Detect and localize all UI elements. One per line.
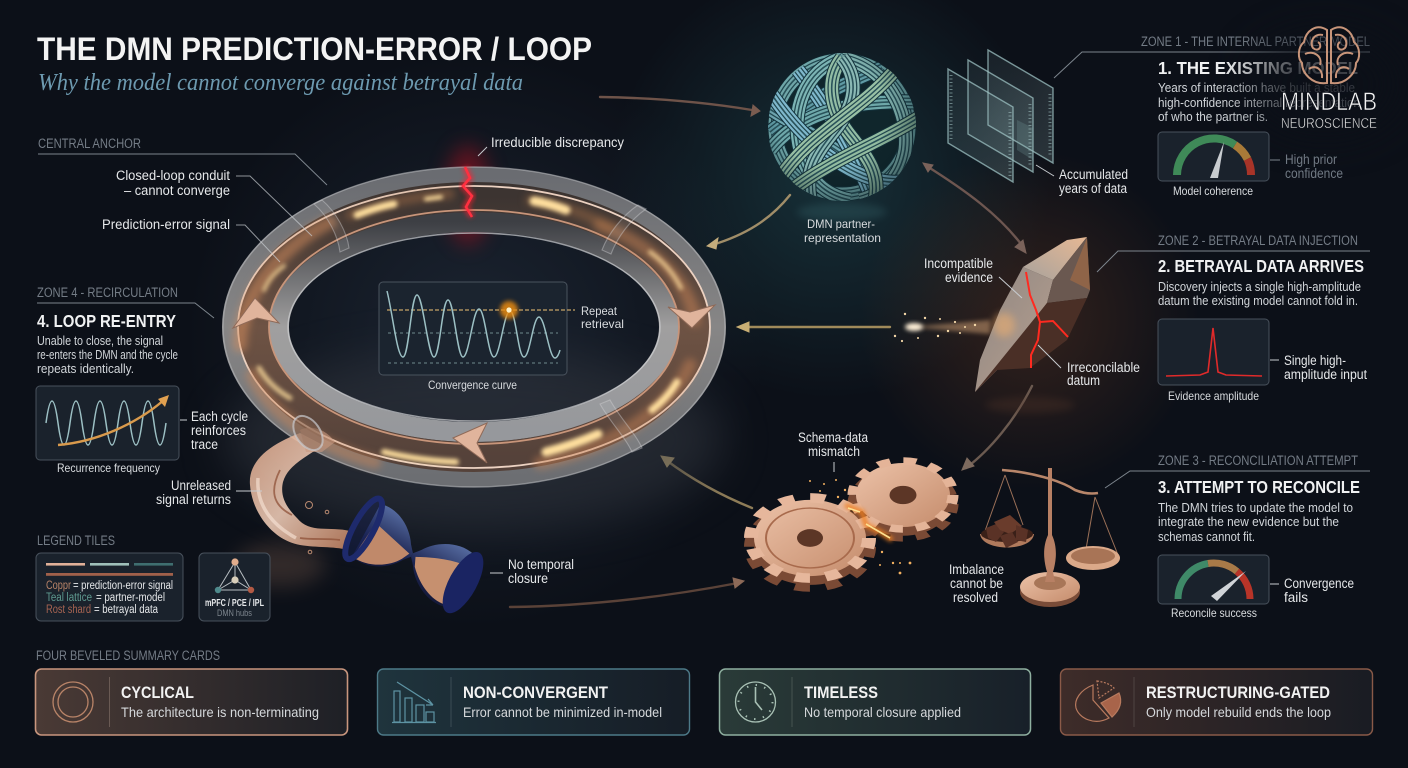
panel: zone 2 betrayal data: 2. BETRAYAL DATA ARRIVES (1158, 256, 1364, 276)
legend tile: materials: Coppr (46, 580, 71, 592)
label: repeat retrieval: retrieval (581, 317, 624, 331)
red glow at crack (446, 145, 490, 245)
label: imbalance cannot be resolved (949, 562, 1004, 605)
zone 3 body: schemas cannot fit. (1158, 529, 1255, 544)
panel: zone 2 betrayal data (1097, 233, 1370, 403)
icon: cycle rings (53, 682, 93, 722)
chart: recurrence frequency (36, 386, 179, 460)
label: accumulated years of data: years of data (1059, 181, 1127, 196)
label: irreconcilable datum: datum (1067, 373, 1100, 388)
label: DMN partner-representation: representation (804, 231, 881, 245)
card: restructuring-gated: RESTRUCTURING-GATED (1146, 683, 1330, 702)
collision sparks (809, 479, 911, 574)
zone 3 body (1158, 500, 1353, 544)
logo: MindLab Neuroscience: MINDLAB (1281, 88, 1377, 116)
red cracks (1026, 272, 1068, 368)
label: each cycle reinforces trace: reinforces (191, 423, 246, 438)
label: irreconcilable datum: Irreconcilable (1067, 360, 1140, 375)
direction arrow: left (233, 298, 279, 328)
label: convergence fails: fails (1284, 590, 1308, 605)
label: no temporal closure (490, 557, 574, 586)
panel: zone 2 betrayal data: Evidence amplitude (1168, 389, 1259, 403)
zone 4 body: re-enters the DMN and the cycle (37, 347, 178, 362)
zone 3 body: integrate the new evidence but the (1158, 514, 1339, 529)
zone 1 body: Years of interaction have built a stable (1158, 80, 1355, 95)
glass tube body (223, 167, 725, 487)
flow arrows (510, 97, 1032, 607)
label: each cycle reinforces trace: trace (191, 437, 218, 452)
panel: zone 4 recirculation: ZONE 4 - RECIRCULATION (37, 285, 178, 300)
card: non-convergent (378, 669, 690, 735)
annotations: left of ring (38, 136, 327, 262)
subtitle: Why the model cannot converge against betrayal data (38, 70, 523, 96)
panel: zone 4 recirculation: Recurrence frequency (57, 461, 160, 475)
legend tile: materials: = prediction-error signal (73, 580, 173, 592)
logo: MindLab Neuroscience (1281, 27, 1377, 132)
label: convergence fails (1270, 576, 1354, 605)
label: schema-data mismatch: Schema-data (798, 430, 868, 445)
zone 4 body: repeats identically. (37, 361, 134, 376)
zone 1 body: of who the partner is. (1158, 109, 1268, 124)
panel: zone 4 recirculation: 4. LOOP RE-ENTRY (37, 311, 176, 331)
label: DMN partner-representation (804, 217, 881, 245)
label: irreducible discrepancy (478, 135, 624, 156)
panel: zone 4 recirculation (36, 285, 248, 475)
label: prediction-error signal: Prediction-error signal (102, 217, 230, 232)
label: imbalance cannot be resolved: Imbalance (949, 562, 1004, 577)
zone 2 body: Discovery injects a single high-amplitude (1158, 279, 1361, 294)
icon: clock (736, 682, 776, 722)
central anchor heading: CENTRAL ANCHOR (38, 136, 141, 151)
label: closed-loop conduit (116, 168, 312, 236)
zone 4 body (37, 333, 178, 376)
label: each cycle reinforces trace: Each cycle (191, 409, 248, 424)
small gear (853, 461, 953, 538)
label: convergence curve: Convergence curve (428, 378, 517, 392)
label: schema-data mismatch (798, 430, 868, 472)
icon: rust shard (975, 237, 1090, 413)
label: accumulated years of data: Accumulated (1059, 167, 1128, 182)
legend tile: DMN hubs (199, 553, 270, 621)
panel: zone 2 betrayal data: ZONE 2 - BETRAYAL DATA INJECTION (1158, 233, 1358, 248)
label: closed-loop conduit: – cannot converge (124, 183, 230, 198)
zone 1 body (1158, 80, 1360, 124)
icon: accumulated glass panes (948, 50, 1053, 182)
label: incompatible evidence (924, 256, 1022, 298)
card: non-convergent: NON-CONVERGENT (463, 683, 609, 702)
label: single high-amplitude input (1270, 353, 1367, 382)
zone 1 body: high-confidence internal representation (1158, 95, 1360, 110)
card: cyclical (36, 669, 348, 735)
panel: zone 3 reconciliation: Reconcile success (1171, 606, 1257, 620)
zone 4 body: Unable to close, the signal (37, 333, 163, 348)
card: timeless (720, 669, 1030, 735)
label: incompatible evidence: evidence (945, 270, 993, 285)
icon: declining bars (392, 682, 436, 722)
zone 2 body (1158, 279, 1361, 308)
comet: betrayal data injection (894, 313, 990, 342)
card: restructuring-gated: Only model rebuild ends the loop (1146, 704, 1331, 720)
icon: teal lattice sphere (768, 53, 918, 221)
label: closed-loop conduit: Closed-loop conduit (116, 168, 230, 183)
label: single high-amplitude input: Single high- (1284, 353, 1346, 368)
icon: hourglass (339, 494, 492, 619)
card: timeless: No temporal closure applied (804, 704, 961, 720)
label: schema-data mismatch: mismatch (808, 444, 860, 459)
label: incompatible evidence: Incompatible (924, 256, 993, 271)
panel: zone 3 reconciliation (1105, 453, 1370, 620)
card: cyclical: CYCLICAL (121, 683, 194, 702)
card: restructuring-gated (1060, 669, 1372, 735)
legend tile: materials: = betrayal data (94, 604, 159, 616)
icon: pie chart (1076, 681, 1121, 721)
label: accumulated years of data (1036, 165, 1128, 196)
direction arrow: bottom (453, 423, 487, 463)
gauge: model coherence (1158, 132, 1269, 181)
label: irreducible discrepancy: Irreducible discrepancy (491, 135, 624, 150)
direction arrow: right (668, 305, 715, 328)
legend section (36, 533, 270, 621)
label: unreleased signal returns: signal returns (156, 492, 231, 507)
central ring conduit (223, 145, 725, 530)
logo: MindLab Neuroscience: NEUROSCIENCE (1281, 115, 1377, 132)
legend tile: materials: Rost shard (46, 604, 91, 616)
label: prediction-error signal (102, 217, 280, 262)
label: high prior confidence (1270, 152, 1343, 181)
central anchor heading (38, 136, 327, 185)
panel: zone 3 reconciliation: ZONE 3 - RECONCILIATION ATTEMPT (1158, 453, 1358, 468)
legend section: LEGEND TILES (37, 533, 115, 548)
label: single high-amplitude input: amplitude input (1284, 367, 1367, 382)
large gear (751, 498, 869, 587)
chart: evidence amplitude (1158, 319, 1269, 385)
label: DMN partner-representation: DMN partner- (807, 217, 875, 231)
warm glow segments (240, 194, 695, 463)
label: irreconcilable datum (1038, 345, 1140, 388)
legend tile: DMN hubs: mPFC / PCE / IPL (205, 598, 264, 609)
ring reflection shadow (224, 350, 724, 530)
label: high prior confidence: High prior (1285, 152, 1337, 167)
card: non-convergent: Error cannot be minimized in-model (463, 704, 662, 720)
gauge: reconcile success (1158, 555, 1269, 604)
panel: zone 1 existing model: 1. THE EXISTING MODEL (1158, 58, 1358, 78)
fracture: irreducible discrepancy (463, 167, 472, 217)
tube couplers (314, 200, 646, 452)
label: repeat retrieval (581, 304, 624, 331)
spout and leaking signal (235, 411, 350, 587)
legend tile: materials: Teal lattice (46, 592, 92, 604)
zone 2 body: datum the existing model cannot fold in. (1158, 293, 1358, 308)
label: each cycle reinforces trace (180, 409, 248, 452)
label: imbalance cannot be resolved: cannot be (950, 576, 1003, 591)
icon: mismatched gears (751, 461, 953, 587)
label: repeat retrieval: Repeat (581, 304, 618, 318)
label: unreleased signal returns (156, 478, 262, 507)
card: cyclical: The architecture is non-terminating (121, 704, 319, 720)
label: imbalance cannot be resolved: resolved (953, 590, 998, 605)
icon: balance scale (980, 468, 1120, 607)
label: convergence fails: Convergence (1284, 576, 1354, 591)
panel: convergence curve (379, 282, 575, 375)
panel: zone 3 reconciliation: 3. ATTEMPT TO RECONCILE (1158, 477, 1360, 497)
card: timeless: TIMELESS (804, 683, 878, 702)
zone 3 body: The DMN tries to update the model to (1158, 500, 1353, 515)
legend tile: DMN hubs: DMN hubs (217, 608, 252, 619)
bright pulses (259, 197, 681, 462)
legend tile: materials: = partner-model (96, 592, 165, 604)
title: THE DMN PREDICTION-ERROR / LOOP (37, 31, 592, 67)
label: unreleased signal returns: Unreleased (171, 478, 231, 493)
legend tile: materials (36, 553, 183, 621)
caption: model coherence: Model coherence (1173, 184, 1253, 198)
label: high prior confidence: confidence (1285, 166, 1343, 181)
label: no temporal closure: closure (508, 571, 548, 586)
heading: summary cards: FOUR BEVELED SUMMARY CARDS (36, 648, 220, 663)
panel: zone 1 existing model (1054, 34, 1370, 124)
label: no temporal closure: No temporal (508, 557, 574, 572)
